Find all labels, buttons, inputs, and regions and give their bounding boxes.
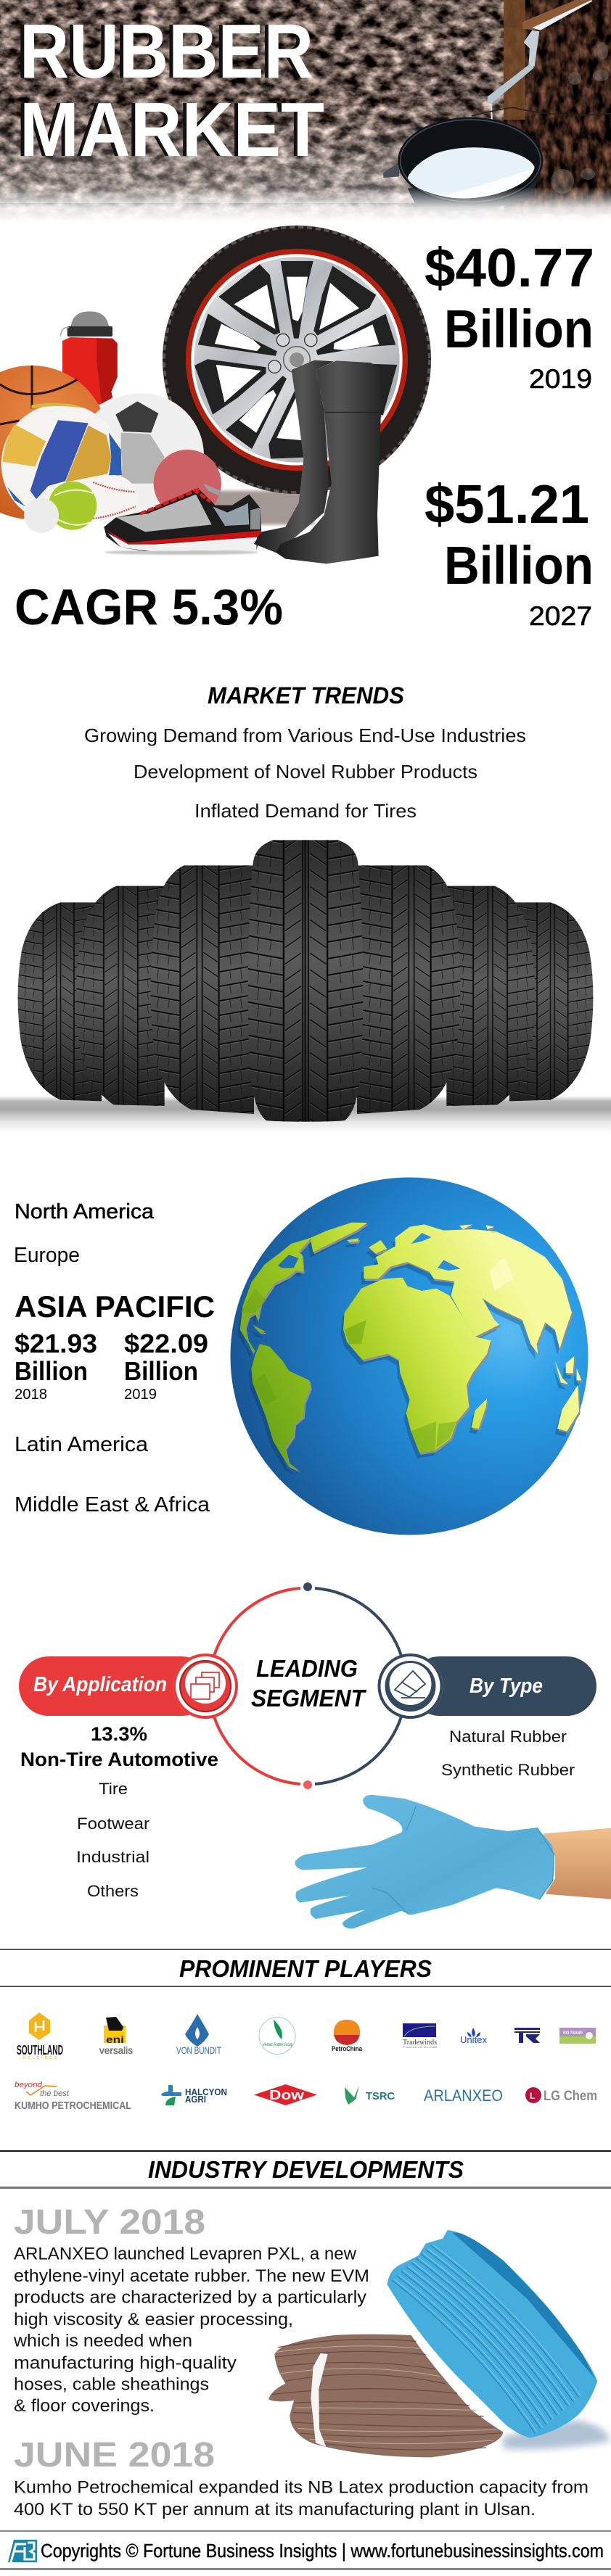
- Asia Pacific 2018 value: 2018: [15, 1387, 47, 1403]
- logo: Southland: [17, 2012, 63, 2060]
- icon: stacked windows: [173, 1654, 238, 1719]
- leading segment heading: [251, 1655, 367, 1712]
- development: July 2018: JULY 2018: [14, 2203, 205, 2242]
- market size 2027: Billion: [444, 535, 594, 595]
- header banner: latex collection photo: [0, 0, 611, 222]
- market size 2019: $40.77: [425, 237, 594, 298]
- logo: Kumho Petrochemical: beyond: [15, 2081, 43, 2089]
- market size 2027: 2027: [529, 601, 592, 631]
- wheel spokes: [175, 254, 415, 486]
- title: MARKET: [20, 87, 324, 173]
- blue rubber glove on arm: [295, 1795, 611, 1928]
- logo: Vietnam Rubber Group: [259, 2018, 295, 2054]
- basketball: [0, 366, 108, 519]
- left tires: [18, 840, 306, 1122]
- logo: LG Chem: LG Chem: [544, 2089, 597, 2104]
- application list: [76, 1780, 149, 1900]
- Asia Pacific 2019 value: 2019: [124, 1387, 157, 1403]
- logo: Unitex: Unitex: [460, 2034, 487, 2045]
- regional list: [14, 1200, 215, 1516]
- logo: Halcyon Agri: HALCYON: [185, 2086, 227, 2097]
- logo: Von Bundit: [176, 2014, 221, 2056]
- region: Asia Pacific: ASIA PACIFIC: [15, 1289, 215, 1324]
- development: July 2018: hoses, cable sheathings: [14, 2374, 209, 2395]
- leading segment ring: [214, 1582, 401, 1789]
- running shoe: [104, 484, 261, 555]
- tennis ball: [49, 482, 97, 530]
- logo: Eni Versalis: [99, 2017, 133, 2056]
- market size 2027: $51.21: [425, 474, 589, 534]
- market trends list: Development of Novel Rubber Products: [134, 761, 477, 783]
- Asia Pacific 2019 value: Billion: [124, 1356, 198, 1386]
- brown coil: [268, 2334, 503, 2457]
- logo: Dow: Dow: [269, 2088, 305, 2102]
- logo: Halcyon Agri: AGRI: [185, 2094, 206, 2105]
- floor shadow: [0, 1096, 611, 1134]
- products illustration: [0, 226, 431, 564]
- icon: eraser: [377, 1654, 443, 1719]
- CAGR: CAGR 5.3%: [15, 579, 283, 635]
- pill: by type: By Type: [469, 1675, 543, 1698]
- golf ball: [24, 498, 59, 533]
- development: June 2018: JUNE 2018: [14, 2436, 215, 2474]
- volleyball: [1, 403, 122, 524]
- development: July 2018: ethylene-vinyl acetate rubber. The new EVM: [14, 2266, 369, 2286]
- water bottle: [60, 311, 118, 405]
- region: Europe: Europe: [14, 1244, 80, 1267]
- logo: LG Chem: [525, 2087, 597, 2104]
- logo: Vietnam Rubber Group: Vietnam Rubber Group: [263, 2043, 292, 2047]
- market size 2019: [425, 237, 594, 394]
- blue coil: [387, 2230, 597, 2438]
- development: July 2018: & floor coverings.: [14, 2396, 155, 2416]
- logo: Kumho Petrochemical: KUMHO PETROCHEMICAL: [15, 2100, 131, 2112]
- Asia Pacific 2018 value: $21.93: [15, 1329, 97, 1358]
- title: [16, 9, 324, 173]
- Asia Pacific 2018 value: [15, 1329, 97, 1403]
- logo: Tradewinds: Tradewinds: [403, 2038, 437, 2047]
- type list: [441, 1727, 575, 1779]
- market size 2019: Billion: [444, 299, 594, 359]
- application list: Tire: [99, 1780, 128, 1798]
- market trends list: Growing Demand from Various End-Use Industries: [84, 724, 526, 746]
- globe: [231, 1178, 588, 1535]
- logo: PetroChina: PetroChina: [332, 2045, 363, 2052]
- development: June 2018: 400 KT to 550 KT per annum at its manufacturing plant in Ulsan.: [14, 2500, 536, 2519]
- logo: Sri Trang: [559, 2028, 596, 2044]
- leading segment heading: LEADING: [256, 1655, 358, 1682]
- development: June 2018: Kumho Petrochemical expanded its NB Latex production capacity from: [14, 2477, 589, 2498]
- title: RUBBER: [16, 9, 310, 94]
- logo: LG Chem: L: [530, 2091, 535, 2101]
- application share: Non-Tire Automotive: [20, 1749, 218, 1770]
- region: Middle East and Africa: Middle East & Africa: [15, 1493, 210, 1516]
- latex spout and bowl: [383, 0, 611, 211]
- logo: Southland: HOLDINGS: [23, 2056, 57, 2060]
- logo: Eni Versalis: versalis: [99, 2044, 133, 2056]
- logo: Southland: SOUTHLAND: [17, 2043, 63, 2057]
- type list: Synthetic Rubber: [441, 1761, 575, 1779]
- development: July 2018: products are characterized by a particularly: [14, 2287, 367, 2308]
- type list: Natural Rubber: [449, 1727, 567, 1746]
- right tires: [306, 840, 593, 1122]
- logo: Von Bundit: VON BUNDIT: [176, 2044, 221, 2056]
- logo: Tradewinds: Plantation Berhad: [403, 2045, 437, 2049]
- market trends list: [84, 724, 526, 822]
- logo: Eni Versalis: eni: [106, 2034, 124, 2045]
- development: June 2018: [14, 2436, 589, 2519]
- logo: Kumho Petrochemical: the best: [40, 2089, 70, 2098]
- region: Latin America: Latin America: [15, 1433, 149, 1456]
- title: RUBBER: [20, 9, 313, 94]
- title: MARKET: [16, 87, 321, 173]
- wire coils image: [268, 2230, 610, 2457]
- seas: [278, 1233, 461, 1271]
- region: North America: North America: [15, 1200, 155, 1223]
- land facets: [240, 1257, 514, 1453]
- market size 2019: 2019: [529, 364, 592, 394]
- development: July 2018: ARLANXEO launched Levapren PXL, a new: [14, 2244, 356, 2264]
- application share: 13.3%: [91, 1723, 147, 1745]
- logo: Halcyon Agri: [161, 2085, 227, 2105]
- development: July 2018: which is needed when: [13, 2331, 192, 2351]
- rubber boots: [254, 360, 381, 564]
- Asia Pacific 2018 value: Billion: [15, 1356, 88, 1386]
- development: July 2018: [13, 2203, 369, 2416]
- icon: Fortune Business Insights logo: [8, 2540, 37, 2562]
- application share: [20, 1723, 218, 1770]
- Asia Pacific 2019 value: $22.09: [124, 1329, 208, 1358]
- logo: PetroChina: [332, 2020, 363, 2052]
- red ball: [154, 450, 221, 517]
- baseball: [89, 475, 137, 524]
- industry developments heading: [0, 2150, 611, 2189]
- market trends heading: MARKET TRENDS: [208, 682, 405, 709]
- application list: Footwear: [77, 1815, 149, 1833]
- row of seven tires: [0, 840, 611, 1134]
- industry developments heading: INDUSTRY DEVELOPMENTS: [148, 2156, 464, 2183]
- logo: Sri Trang: SRI TRANG: [563, 2031, 583, 2036]
- logo: Kumho Petrochemical: [15, 2081, 131, 2112]
- prominent players heading: PROMINENT PLAYERS: [179, 1955, 432, 1982]
- logo: Tradewinds: [403, 2023, 437, 2049]
- pill: by type: [377, 1654, 596, 1719]
- market trends list: Inflated Demand for Tires: [194, 800, 417, 822]
- leading segment heading: SEGMENT: [251, 1685, 367, 1712]
- footer: [0, 2530, 611, 2570]
- development: July 2018: high viscosity & easier processing,: [14, 2310, 293, 2329]
- logo: Dow: [254, 2084, 317, 2105]
- logo: Arlanxeo: ARLANXEO: [424, 2086, 503, 2105]
- application list: Others: [87, 1882, 139, 1900]
- tree trunk: [504, 0, 611, 214]
- application list: Industrial: [76, 1848, 149, 1866]
- company logos: [15, 2012, 597, 2112]
- logo: Unitex: [460, 2028, 487, 2045]
- continents: [237, 1223, 583, 1477]
- market size 2027: [425, 474, 594, 631]
- logo: TSRC: TSRC: [366, 2090, 395, 2102]
- soccer ball: [79, 393, 204, 518]
- pill: by application: By Application: [33, 1673, 167, 1696]
- bottom fade: [0, 187, 611, 222]
- development: July 2018: manufacturing high-quality: [14, 2353, 237, 2373]
- Asia Pacific 2019 value: [124, 1329, 208, 1403]
- pill: by application: [19, 1654, 238, 1719]
- floor shadow: [213, 491, 314, 524]
- car wheel with red rim: [163, 226, 431, 494]
- logo: TSRC: [345, 2086, 395, 2105]
- logo: TTR: [514, 2028, 540, 2043]
